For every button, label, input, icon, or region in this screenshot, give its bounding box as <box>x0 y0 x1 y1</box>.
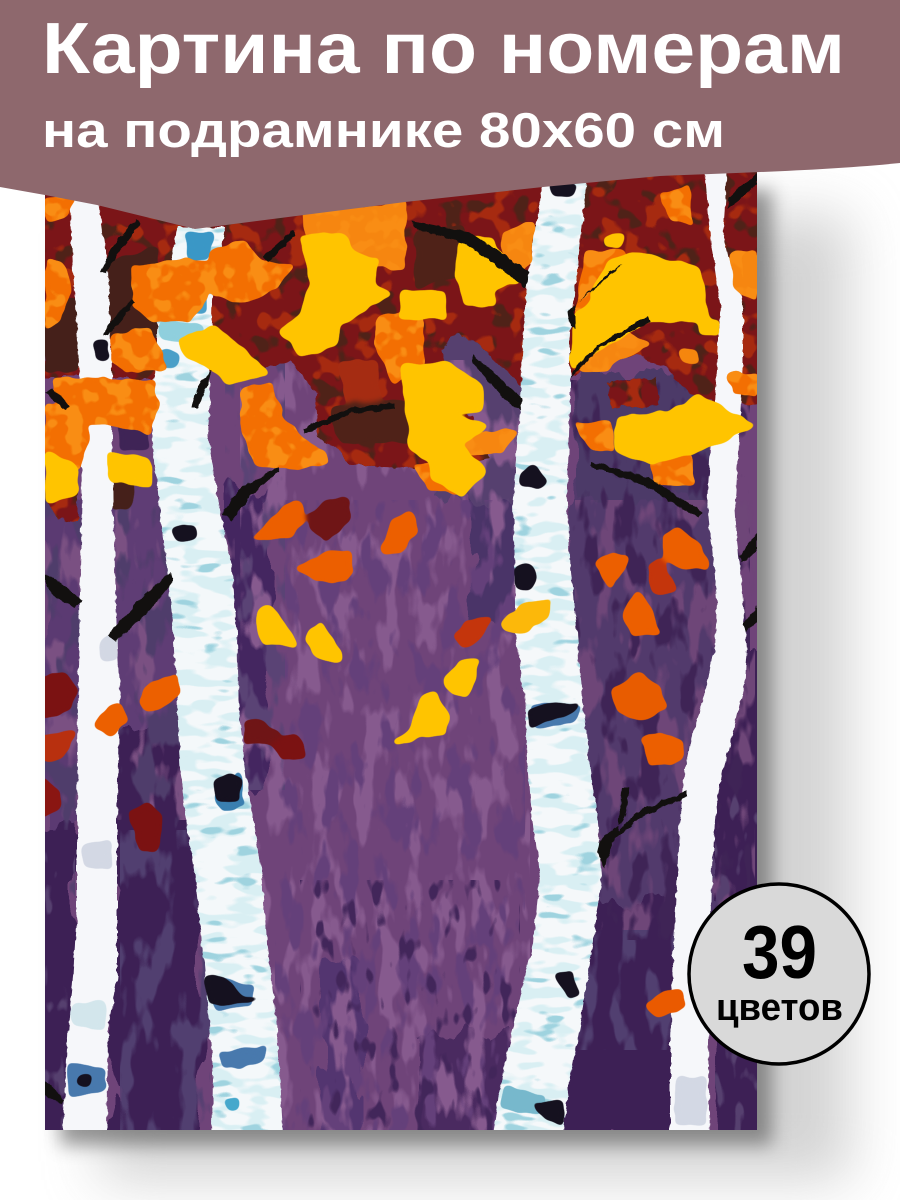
leaf: dark red pair <box>243 718 282 745</box>
leaf: yellow right <box>303 620 342 663</box>
leaf: bottom orange <box>645 990 686 1018</box>
dark bark knots <box>78 183 582 1127</box>
background slate paint patches <box>45 360 750 1130</box>
leaf: orange upper <box>380 511 418 553</box>
trunk: second from left <box>152 227 283 1135</box>
leaf: orange wide <box>295 550 355 583</box>
leaf: dark red edge <box>40 673 78 720</box>
leaf: red lower edge <box>40 777 62 820</box>
background deep shadow patches <box>45 780 757 1130</box>
leaf: right top <box>662 528 710 570</box>
yellow foliage <box>45 232 757 505</box>
header banner <box>0 0 900 229</box>
orange foliage <box>45 185 757 495</box>
leaf: red edge <box>40 730 78 763</box>
black branches <box>45 172 757 1105</box>
falling leaves <box>40 498 710 1018</box>
leaf: yellow left <box>255 605 297 648</box>
leaf: right cluster <box>595 552 629 588</box>
leaf: dark red <box>306 498 350 542</box>
leaf: yellow large <box>392 690 450 746</box>
trunk: third from left <box>492 182 602 1135</box>
painting: birch trees in autumn <box>30 165 775 1140</box>
subtitle: на подрамнике 80x60 см <box>42 104 725 158</box>
leaf: orange <box>248 500 305 540</box>
dark red foliage <box>40 165 765 520</box>
dark brown foliage shadows <box>45 225 465 510</box>
leaf: right lower <box>641 732 684 766</box>
leaf: right large <box>610 672 667 722</box>
badge: 39 colours: 39 <box>742 910 817 994</box>
white trunks <box>63 172 747 1135</box>
leaf: yellow on trunk <box>500 598 553 632</box>
bark markings <box>66 232 708 1125</box>
badge: 39 colours: цветов <box>716 987 843 1029</box>
forest background zones <box>30 310 775 1140</box>
badge: 39 colours <box>689 884 869 1064</box>
leaf: dark red pair right <box>272 732 305 760</box>
leaf: red-orange right <box>648 555 678 595</box>
canvas shadow <box>60 190 850 1180</box>
leaf: left orange <box>138 673 180 713</box>
title: Картина по номерам <box>42 9 845 89</box>
leaf: yellow small <box>443 658 482 697</box>
leaf: right middle <box>623 590 662 636</box>
background light paint patches <box>45 360 755 1130</box>
birch trunks <box>152 182 602 1135</box>
trunk: right <box>670 172 747 1135</box>
leaf: left small <box>93 703 127 737</box>
trunk: far left <box>63 200 120 1135</box>
leaf: dark red lower <box>128 802 163 852</box>
leaf: red-orange centre <box>453 617 492 647</box>
